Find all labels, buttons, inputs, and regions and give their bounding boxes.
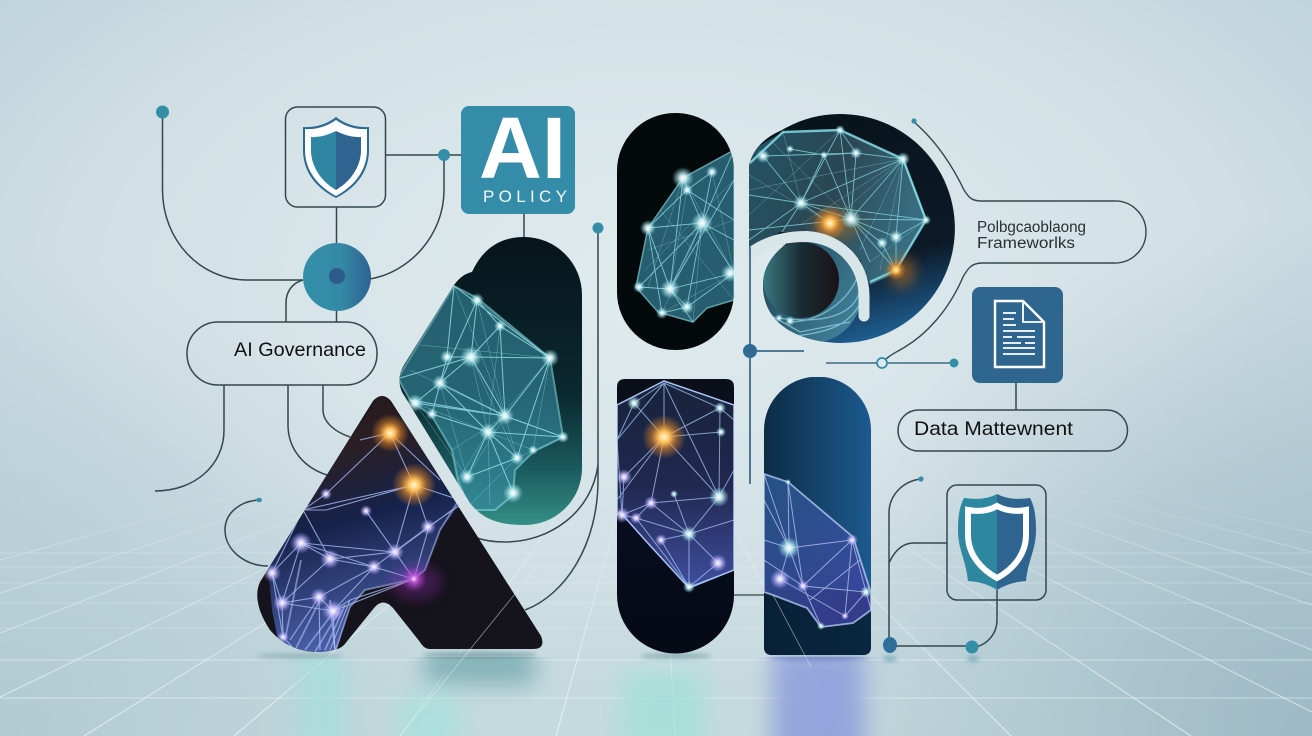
letter P: round network shape bbox=[745, 112, 957, 345]
badge: AI Policy: AI bbox=[479, 100, 566, 197]
letter A lower: triangle with network bbox=[250, 390, 550, 655]
connector: vertical line with node bbox=[743, 247, 804, 484]
node: policy junction dot bbox=[438, 149, 450, 161]
hub circle bbox=[303, 243, 371, 311]
label: frameworks: Frameworlks bbox=[977, 235, 1075, 252]
label: AI Governance: AI Governance bbox=[234, 339, 366, 361]
label: frameworks: Polbgcaoblaong bbox=[977, 219, 1086, 236]
label: frameworks bbox=[977, 219, 1086, 252]
letter I lower: dark pill with network bbox=[614, 379, 734, 655]
letter I upper: black pill with network bbox=[617, 113, 739, 350]
label: Data Mattewnent bbox=[898, 410, 1128, 451]
connector: document to pill bbox=[1015, 383, 1017, 410]
icon: document card bbox=[972, 287, 1063, 383]
label: Data Mattewnent: Data Mattewnent bbox=[914, 418, 1074, 440]
icon: second shield card bbox=[947, 485, 1046, 600]
connectors between letters bbox=[400, 563, 811, 736]
label: AI Governance bbox=[187, 322, 377, 385]
letter A upper: teal network pill bbox=[395, 235, 585, 527]
badge: AI Policy bbox=[461, 100, 575, 214]
node: right connector dot bbox=[592, 222, 604, 234]
node: small loop dot bbox=[256, 498, 262, 502]
letter I lower right: blue pill with network bbox=[764, 377, 872, 655]
icon: shield card bbox=[286, 107, 386, 207]
connector lines: left circuit bbox=[155, 112, 598, 610]
connector: lower right circuit bbox=[883, 476, 997, 654]
connector: frameworks outline bbox=[826, 118, 1146, 368]
badge: AI Policy: POLICY bbox=[483, 187, 567, 206]
node: top-left dot bbox=[156, 106, 169, 118]
floor reflections bbox=[256, 645, 979, 736]
